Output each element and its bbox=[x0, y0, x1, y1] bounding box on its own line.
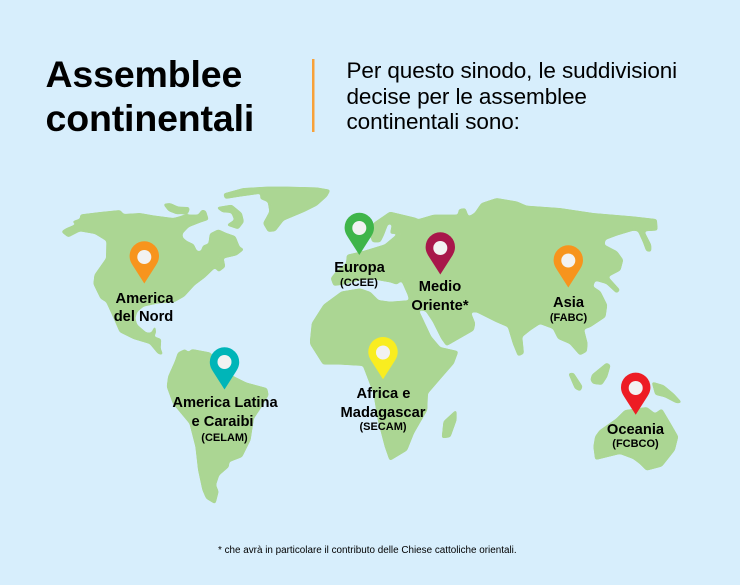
intro text: continentali sono: bbox=[346, 109, 520, 134]
pin and label: America del Nord bbox=[114, 241, 174, 325]
pin and label: Europa: Europa bbox=[334, 260, 386, 276]
pin and label: Europa: (CCEE) bbox=[340, 277, 378, 289]
title bbox=[46, 53, 254, 139]
pin and label: America Latina e Caraibi: (CELAM) bbox=[201, 432, 248, 444]
pin and label: America Latina e Caraibi: e Caraibi bbox=[191, 414, 254, 430]
footnote: * che avrà in particolare il contributo delle Chiese cattoliche orientali. bbox=[218, 545, 517, 556]
pin and label: Europa bbox=[334, 213, 386, 289]
pin and label: Medio Oriente: Oriente* bbox=[411, 298, 469, 314]
pin and label: America del Nord: America bbox=[116, 291, 174, 307]
pin and label: Africa e Madagascar: Madagascar bbox=[341, 405, 426, 421]
Americas and Greenland bbox=[62, 187, 330, 503]
orange divider bbox=[312, 59, 314, 132]
pin and label: Medio Oriente: Medio bbox=[419, 279, 461, 295]
Eurasia, Africa and Oceania bbox=[311, 199, 681, 470]
pin and label: America Latina e Caraibi: America Latina bbox=[172, 395, 278, 411]
pin and label: Asia bbox=[550, 245, 587, 324]
pin and label: America Latina e Caraibi bbox=[172, 347, 278, 444]
intro text: decise per le assemblee bbox=[346, 84, 587, 109]
pin and label: Oceania bbox=[607, 373, 665, 450]
intro text: Per questo sinodo, le suddivisioni bbox=[346, 58, 677, 83]
pin and label: Asia: Asia bbox=[553, 295, 585, 311]
pin and label: Asia: (FABC) bbox=[550, 312, 587, 324]
world map bbox=[62, 187, 681, 503]
title: continentali bbox=[46, 97, 254, 139]
intro text bbox=[346, 58, 677, 134]
title: Assemblee bbox=[46, 53, 242, 95]
pin and label: Africa e Madagascar: Africa e bbox=[357, 386, 410, 402]
pin and label: America del Nord: del Nord bbox=[114, 309, 173, 325]
pin and label: Africa e Madagascar: (SECAM) bbox=[359, 421, 407, 433]
pin and label: Oceania: Oceania bbox=[607, 422, 665, 438]
pin and label: Medio Oriente bbox=[411, 232, 469, 314]
pin and label: Oceania: (FCBCO) bbox=[612, 438, 659, 450]
pin and label: Africa e Madagascar bbox=[341, 337, 426, 433]
